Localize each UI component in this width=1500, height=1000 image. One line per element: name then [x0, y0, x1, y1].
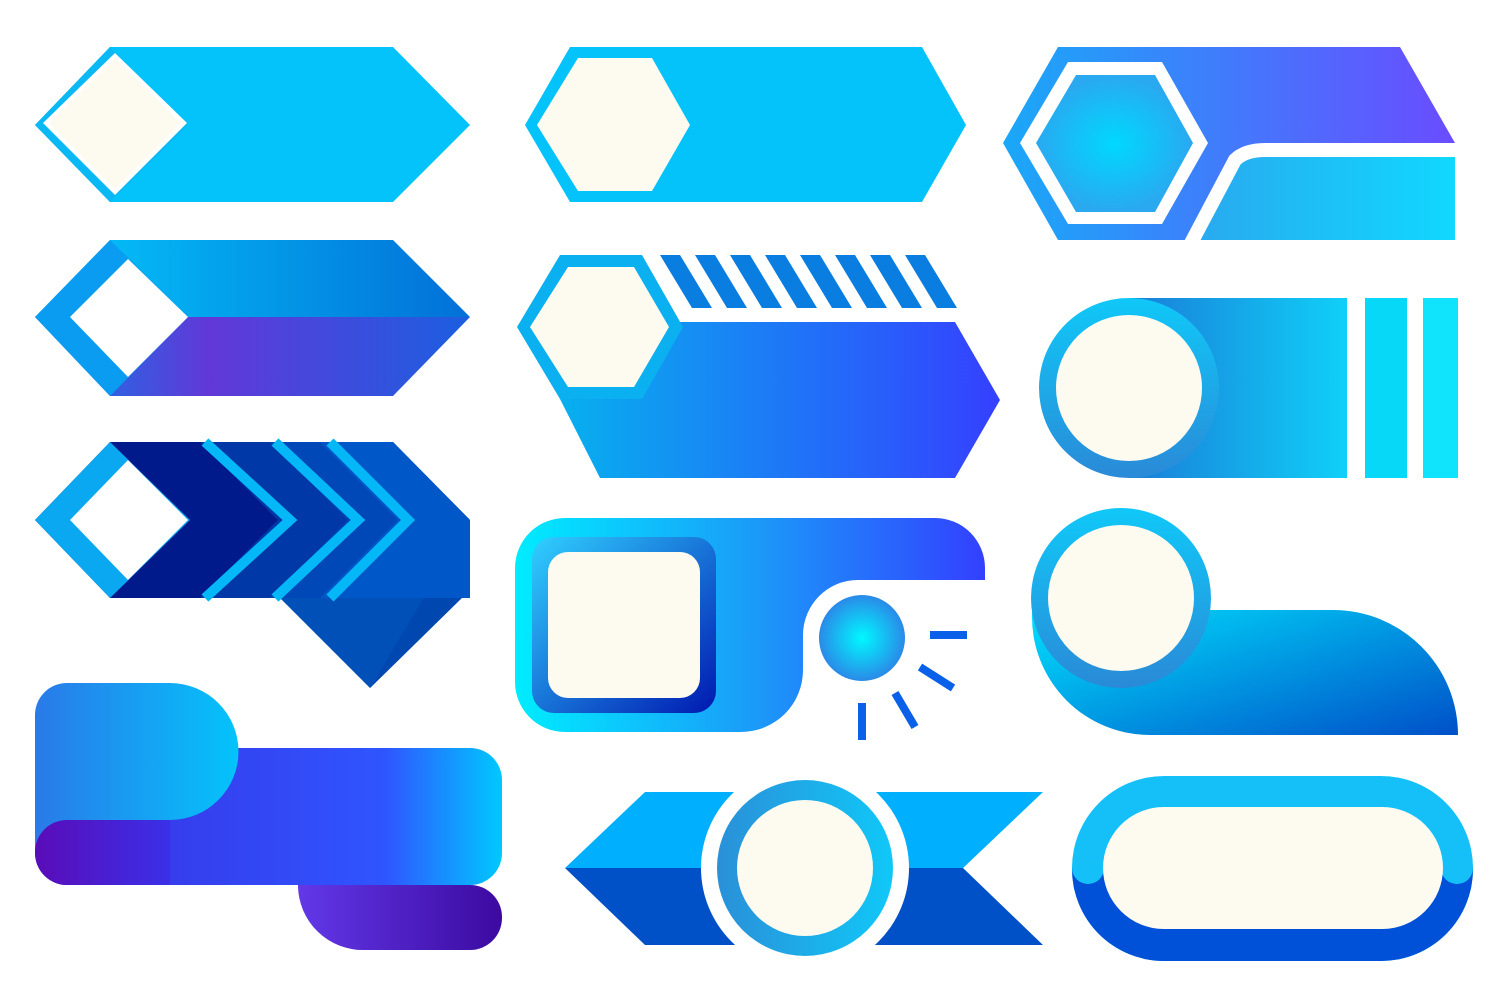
banner 4: folded ribbon: [35, 683, 502, 950]
banner 3: chevron arrow: [35, 442, 470, 688]
banner 12: pill: [1072, 776, 1473, 961]
banner 10: circle with bars: [1039, 298, 1458, 478]
banner 2: split diamond arrow: [35, 240, 470, 396]
banner 5: hexagon arrow: [525, 47, 966, 202]
banner 8: bow tie circle: [565, 764, 1043, 972]
icon: sun: [819, 595, 967, 740]
banner 7: rounded panel with sun: [515, 518, 985, 740]
banner 11: circle with quarter wing: [1031, 508, 1458, 735]
banner 6: hexagon with stripes: [517, 255, 1000, 478]
banner 1: diamond arrow: [35, 47, 470, 202]
banner 9: hexagon with gradient wing: [1003, 47, 1460, 245]
